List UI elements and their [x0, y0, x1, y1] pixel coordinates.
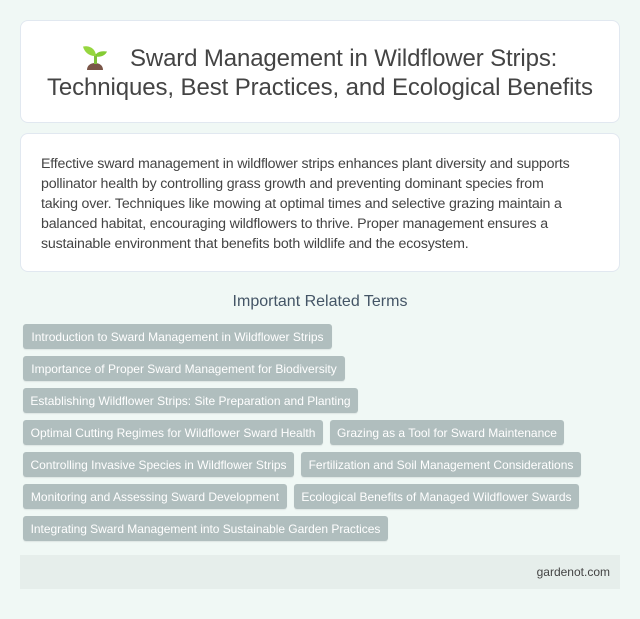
header panel [20, 20, 620, 123]
tag [23, 324, 332, 349]
intro paragraph: sustainable environment that benefits both wildlife and the ecosystem. [41, 236, 468, 252]
tag: Fertilization and Soil Management Considerations [309, 458, 573, 472]
icon: seedling [83, 46, 107, 70]
tag: Monitoring and Assessing Sward Development [31, 490, 279, 504]
footer bar [20, 555, 620, 589]
tag: Integrating Sward Management into Sustainable Garden Practices [31, 522, 380, 536]
title: Sward Management in Wildflower Strips: [130, 45, 557, 72]
intro paragraph: pollinator health by controlling grass growth and preventing dominant species from [41, 176, 544, 192]
tag [23, 420, 323, 445]
tag: Introduction to Sward Management in Wildflower Strips [31, 330, 324, 344]
tag: Importance of Proper Sward Management for Biodiversity [31, 362, 337, 376]
intro text panel [20, 133, 620, 272]
tag: Ecological Benefits of Managed Wildflower Swards [301, 490, 572, 504]
intro paragraph: taking over. Techniques like mowing at optimal times and selective grazing maintain a [41, 196, 562, 212]
intro paragraph: Effective sward management in wildflower strips enhances plant diversity and supports [41, 156, 570, 172]
heading: related terms: Important Related Terms [233, 293, 407, 310]
tag: Establishing Wildflower Strips: Site Preparation and Planting [30, 394, 351, 408]
title [47, 45, 593, 101]
intro paragraph [41, 156, 570, 252]
intro paragraph: balanced habitat, encouraging wildflowers to thrive. Proper management ensures a [41, 216, 548, 232]
tag [23, 356, 345, 381]
tag [330, 420, 564, 445]
tag [294, 484, 579, 509]
tag: Grazing as a Tool for Sward Maintenance [337, 426, 557, 440]
tag [23, 388, 358, 413]
tag [23, 452, 294, 477]
tag: Optimal Cutting Regimes for Wildflower Sward Health [31, 426, 315, 440]
tag [301, 452, 581, 477]
tag [23, 484, 287, 509]
footer source: gardenot.com [537, 565, 610, 579]
tag: Controlling Invasive Species in Wildflower Strips [30, 458, 287, 472]
tag list [23, 324, 581, 542]
title: Techniques, Best Practices, and Ecological Benefits [47, 74, 593, 101]
tag [23, 516, 388, 541]
